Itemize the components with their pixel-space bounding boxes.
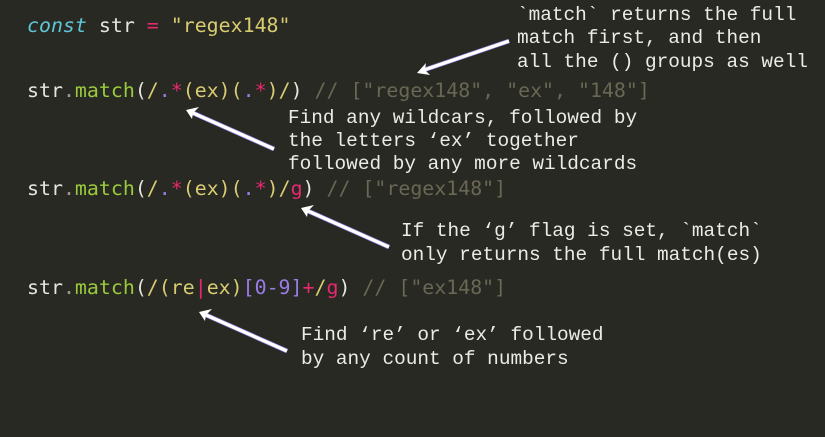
- annotation: wildcards: followed by any more wildcards: [288, 153, 637, 175]
- annotation: g flag: [401, 220, 762, 266]
- annotation: match returns: [517, 4, 808, 73]
- annotation: wildcards: [288, 107, 637, 175]
- annotation: match returns: `match` returns the full: [517, 4, 796, 26]
- arrow: to alternation: [199, 309, 287, 351]
- code: alternation match: str.match(/(re|ex)[0-9]+/g) // ["ex148"]: [27, 276, 506, 299]
- annotation: wildcards: the letters ‘ex’ together: [288, 130, 579, 152]
- code: match without flag: str.match(/.*(ex)(.*)/) // ["regex148", "ex", "148"]: [27, 79, 650, 102]
- annotation: match returns: all the () groups as well: [517, 51, 808, 73]
- arrow: to g flag: [301, 205, 389, 247]
- code: match with g flag: str.match(/.*(ex)(.*)/g) // ["regex148"]: [27, 177, 506, 200]
- arrow: to wildcard regex: [186, 107, 274, 149]
- annotation: wildcards: Find any wildcars, followed by: [288, 107, 637, 129]
- annotation: re or ex: Find ‘re’ or ‘ex’ followed: [301, 324, 604, 346]
- annotation: re or ex: by any count of numbers: [301, 348, 569, 370]
- annotation: g flag: only returns the full match(es): [401, 244, 762, 266]
- annotation: match returns: match first, and then: [517, 27, 761, 49]
- arrow: to match result: [417, 41, 509, 75]
- code: const declaration: const str = "regex148": [27, 14, 291, 37]
- annotation: re or ex: [301, 324, 604, 370]
- annotation: g flag: If the ‘g’ flag is set, `match`: [401, 220, 762, 242]
